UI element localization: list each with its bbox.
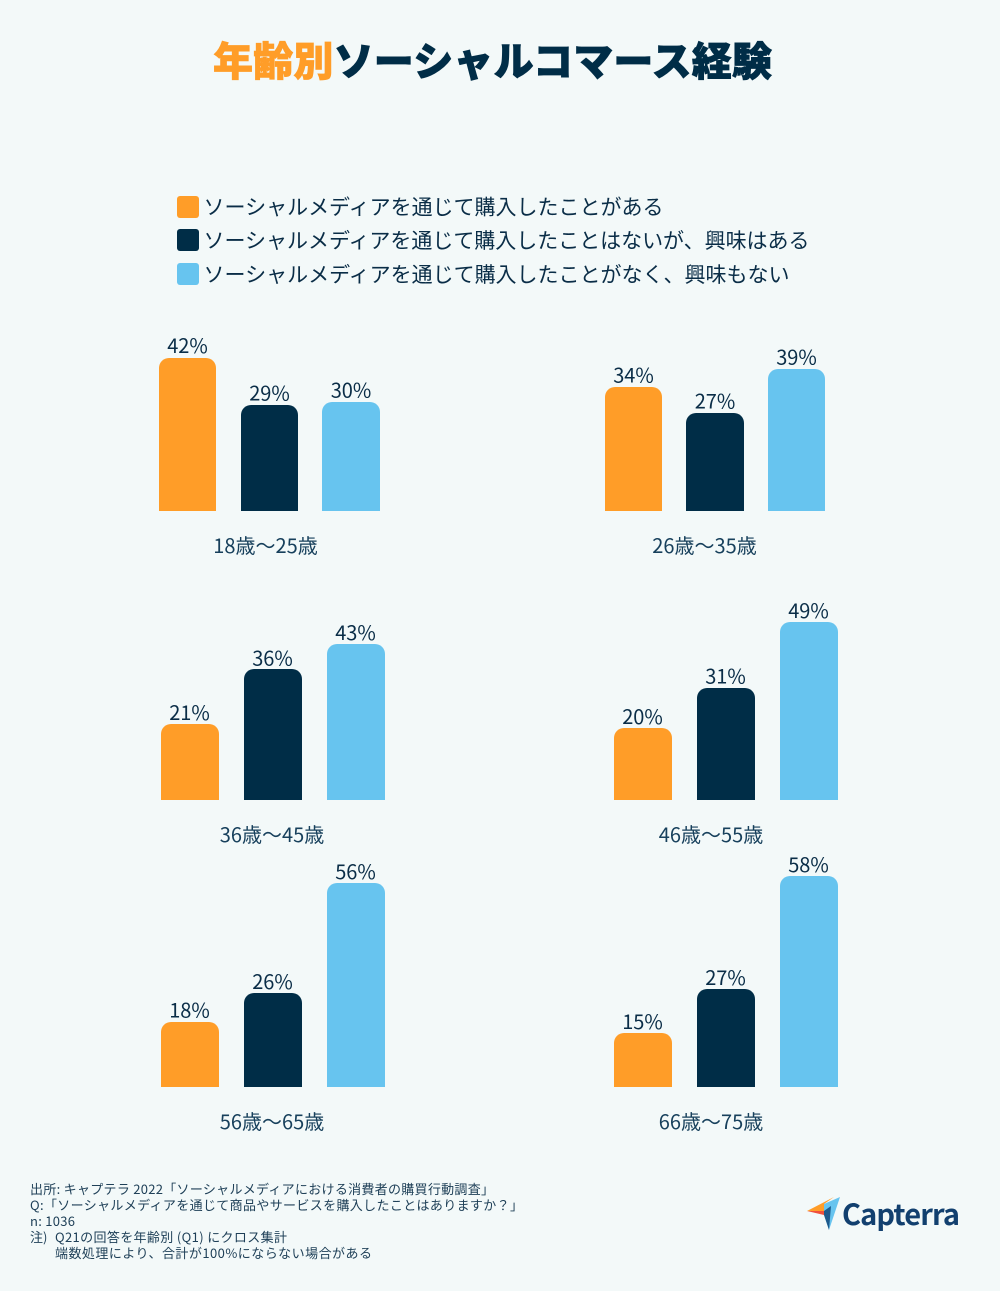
icon: Capterra arrow — [807, 1197, 840, 1230]
chart: 18-25: 18歳〜25歳 — [213, 530, 318, 559]
chart: 18-25: 42% — [167, 330, 208, 359]
chart: 36-45 — [161, 617, 385, 848]
chart: 36-45: 36% — [252, 642, 293, 671]
chart: 46-55: 31% — [705, 660, 746, 690]
chart: 66-75: 27% — [705, 962, 746, 991]
logo: Capterra — [807, 1192, 960, 1234]
chart: 18-25 — [159, 330, 380, 559]
legend item: not purchased but interested: ソーシャルメディアを通じて購入したことはないが、興味はある — [204, 225, 810, 255]
source notes: Q21の回答を年齢別 (Q1) にクロス集計 — [55, 1227, 287, 1246]
chart: 36-45: 36歳〜45歳 — [220, 819, 324, 848]
chart: 36-45: 43% — [335, 617, 376, 646]
chart: 46-55: 20% — [622, 701, 663, 730]
source notes — [30, 1179, 523, 1262]
chart: 26-35: 39% — [776, 342, 817, 370]
legend item: purchased: ソーシャルメディアを通じて購入したことがある — [204, 192, 664, 222]
chart: 66-75 — [614, 849, 838, 1135]
title: 年齢別ソーシャルコマース経験 — [213, 30, 772, 88]
chart: 56-65: 18% — [169, 994, 210, 1024]
chart: 26-35: 26歳〜35歳 — [652, 530, 757, 559]
chart: 56-65 — [161, 856, 385, 1135]
source notes: 端数処理により、合計が100%にならない場合がある — [55, 1243, 372, 1262]
chart: 26-35 — [605, 342, 825, 559]
source notes: 注) — [30, 1227, 47, 1246]
chart: 46-55: 46歳〜55歳 — [659, 819, 763, 848]
logo wordmark: Capterra — [842, 1192, 960, 1234]
chart: 26-35: 27% — [695, 386, 735, 414]
chart: 56-65: 26% — [252, 966, 293, 995]
chart: 46-55 — [614, 595, 838, 848]
chart: 46-55: 49% — [788, 595, 829, 624]
chart: 66-75: 15% — [622, 1006, 663, 1035]
chart: 56-65: 56% — [335, 856, 376, 885]
chart: 66-75: 58% — [788, 849, 829, 878]
chart: 36-45: 21% — [169, 697, 210, 726]
legend item: not purchased and not interested: ソーシャルメディアを通じて購入したことがなく、興味もない — [204, 259, 790, 289]
chart: 56-65: 56歳〜65歳 — [220, 1106, 324, 1135]
source notes: 出所: キャプテラ 2022「ソーシャルメディアにおける消費者の購買行動調査」 — [30, 1179, 494, 1198]
chart: 66-75: 66歳〜75歳 — [659, 1106, 763, 1135]
source notes: Q:「ソーシャルメディアを通じて商品やサービスを購入したことはありますか？」 — [30, 1195, 523, 1214]
chart: 26-35: 34% — [613, 360, 654, 388]
chart: 18-25: 30% — [331, 374, 371, 404]
legend — [177, 192, 810, 289]
source notes: n: 1036 — [30, 1211, 75, 1230]
chart: 18-25: 29% — [249, 378, 290, 406]
